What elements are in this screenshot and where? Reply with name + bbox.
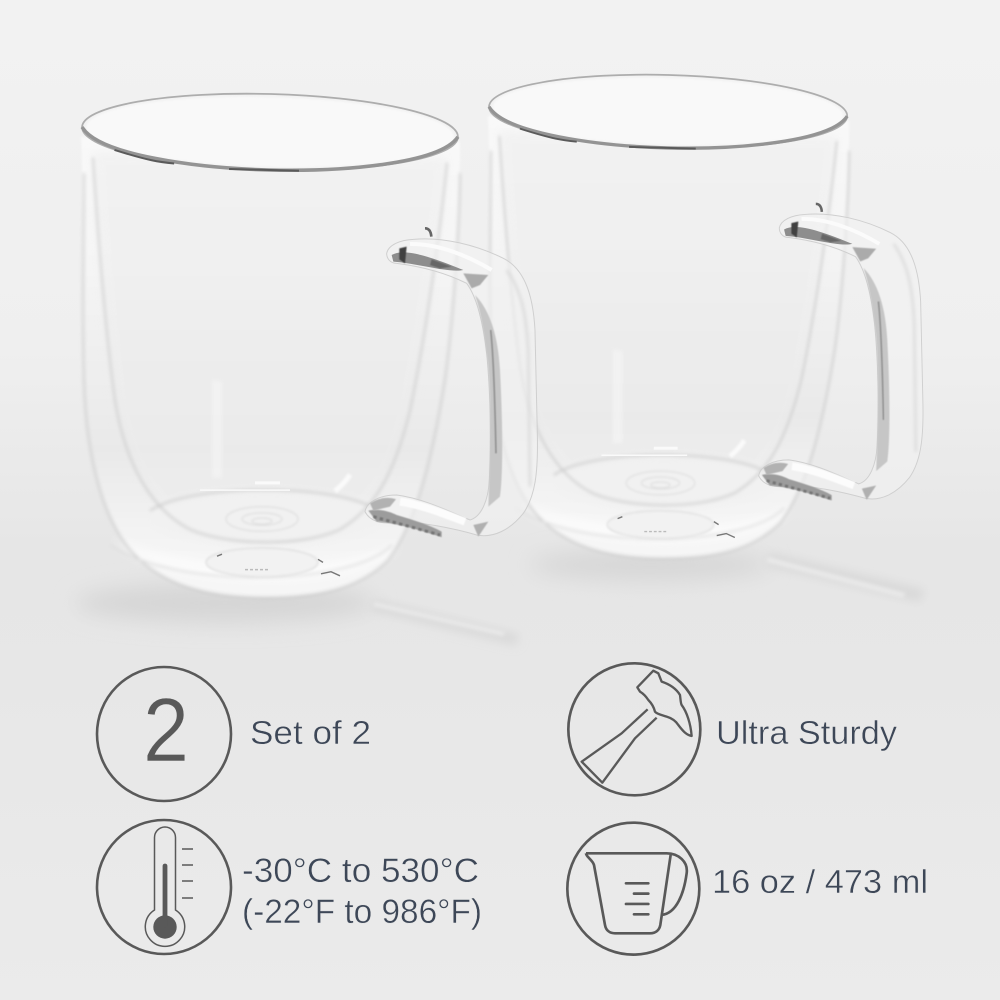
label: temperature range: (-22°F to 986°F) [242,893,482,931]
icon: measuring jug [567,823,699,955]
feature: capacity [567,823,928,955]
feature: set of 2 [97,667,371,801]
feature: temperature range [97,820,482,954]
label: ultra sturdy: Ultra Sturdy [716,715,897,752]
icon: hammer [568,663,700,795]
left glass mug [81,89,537,598]
feature: ultra sturdy [568,663,897,795]
icon: number 2 [97,667,231,801]
right glass mug [488,70,923,558]
label: set of 2: Set of 2 [250,715,371,752]
label: temperature range [242,852,482,931]
icon: thermometer [97,820,231,954]
label: capacity: 16 oz / 473 ml [712,864,928,901]
mug shadows [75,549,925,645]
label: temperature range: -30°C to 530°C [242,852,479,890]
icon: number 2: 2 [143,681,189,781]
